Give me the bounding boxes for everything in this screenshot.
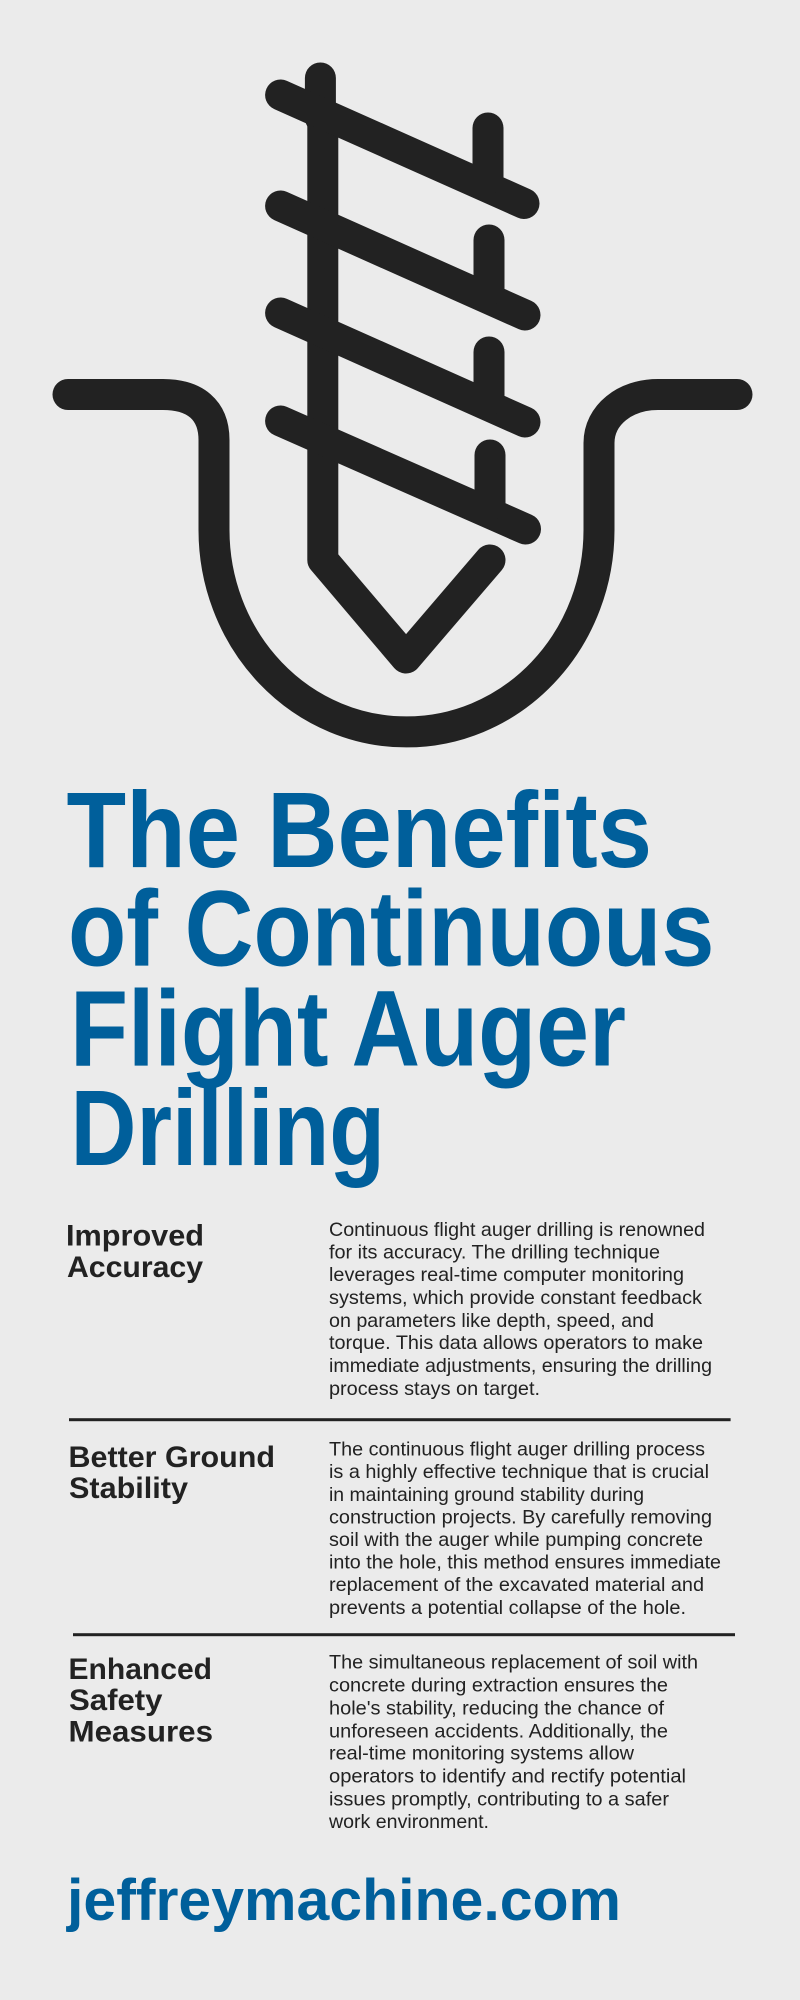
text block: better ground stability description: into the hole, this method ensures immediate [329, 1552, 721, 1574]
text block: improved accuracy description: leverages real-time computer monitoring [329, 1264, 684, 1286]
title: of Continuous [68, 868, 714, 989]
text block: better ground stability description: replacement of the excavated material and [329, 1574, 704, 1596]
icon: auger flights [281, 95, 526, 529]
text block: improved accuracy description: torque. This data allows operators to make [329, 1332, 703, 1354]
text block: enhanced safety measures description: real-time monitoring systems allow [329, 1742, 635, 1764]
text block: enhanced safety measures description: issues promptly, contributing to a safer [329, 1788, 670, 1810]
heading: enhanced safety measures: Enhanced [68, 1653, 212, 1686]
title: Flight Auger [70, 968, 626, 1089]
panel: improved accuracy [66, 1219, 712, 1400]
text block: improved accuracy description: immediate adjustments, ensuring the drilling [329, 1355, 712, 1377]
heading: improved accuracy: Improved [66, 1220, 204, 1253]
text block: improved accuracy description: for its accuracy. The drilling technique [329, 1241, 660, 1263]
footer: website url: jeffreymachine.com [66, 1868, 621, 1933]
heading: enhanced safety measures: Measures [68, 1716, 213, 1749]
text block: improved accuracy description: Continuous flight auger drilling is renowned [329, 1219, 705, 1241]
text block: enhanced safety measures description: hole's stability, reducing the chance of [329, 1697, 665, 1719]
text block: better ground stability description: construction projects. By carefully removing [329, 1506, 712, 1528]
heading: better ground stability: Better Ground [68, 1441, 275, 1474]
title [66, 769, 714, 1188]
heading: improved accuracy: Accuracy [67, 1251, 204, 1284]
heading: better ground stability: Stability [69, 1472, 189, 1505]
text block: better ground stability description: soil with the auger while pumping concrete [329, 1529, 703, 1551]
heading: enhanced safety measures [68, 1653, 213, 1749]
text block: better ground stability description: is a highly effective technique that is crucial [329, 1461, 709, 1483]
title: Drilling [70, 1067, 385, 1188]
text block: better ground stability description: prevents a potential collapse of the hole. [329, 1597, 686, 1619]
icon: ground hole outline [68, 394, 737, 732]
text block: enhanced safety measures description: The simultaneous replacement of soil with [329, 1651, 698, 1673]
text block: improved accuracy description [329, 1219, 712, 1400]
icon: auger shaft and tip [320, 78, 490, 658]
title: The Benefits [66, 769, 652, 890]
text block: improved accuracy description: on parameters like depth, speed, and [329, 1310, 654, 1332]
heading: improved accuracy [66, 1220, 204, 1284]
text block: enhanced safety measures description: unforeseen accidents. Additionally, the [329, 1720, 668, 1742]
text block: enhanced safety measures description: concrete during extraction ensures the [329, 1674, 668, 1696]
heading: better ground stability [68, 1441, 275, 1505]
panel: enhanced safety measures [68, 1651, 698, 1833]
text block: better ground stability description: The continuous flight auger drilling process [329, 1438, 705, 1460]
icon: auger drill in ground [68, 78, 737, 732]
text block: better ground stability description [329, 1438, 721, 1619]
text block: better ground stability description: in maintaining ground stability during [329, 1484, 644, 1506]
text block: enhanced safety measures description [328, 1651, 698, 1833]
text block: improved accuracy description: process stays on target. [329, 1378, 540, 1400]
text block: enhanced safety measures description: operators to identify and rectify potential [329, 1765, 686, 1787]
text block: enhanced safety measures description: work environment. [328, 1811, 489, 1833]
panel: better ground stability [68, 1438, 721, 1619]
heading: enhanced safety measures: Safety [69, 1684, 163, 1717]
text block: improved accuracy description: systems, which provide constant feedback [329, 1287, 702, 1309]
